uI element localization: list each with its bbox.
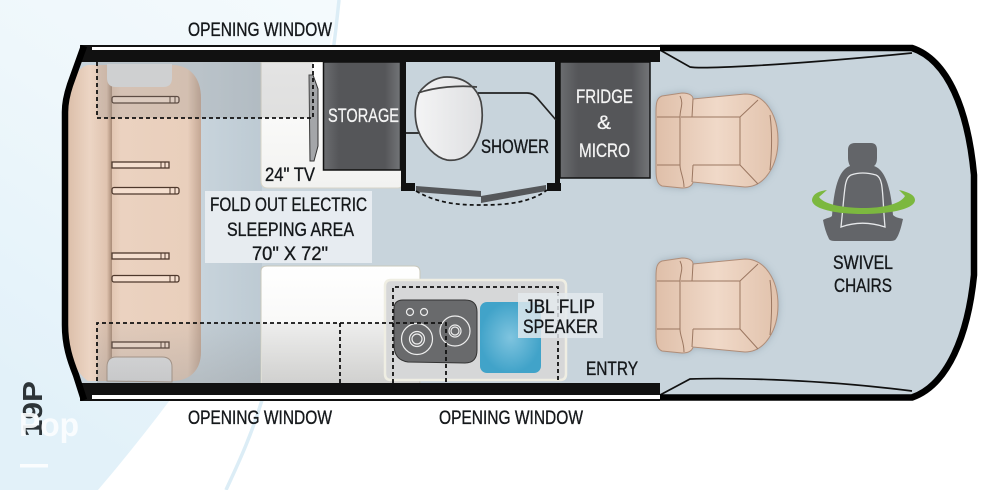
label background: speaker bbox=[518, 293, 603, 338]
label: fold out sleeping area: 70" X 72" bbox=[252, 244, 328, 265]
watermark: Pop logo: Pop bbox=[19, 406, 79, 443]
shower doors bbox=[416, 185, 546, 203]
label: fold out sleeping area bbox=[210, 195, 367, 265]
toilet bbox=[415, 77, 482, 160]
label: shower: SHOWER bbox=[481, 137, 549, 158]
label: JBL flip speaker: JBL FLIP bbox=[525, 297, 595, 318]
fridge and microwave bbox=[560, 62, 650, 178]
cockpit floor lines and shell bbox=[65, 45, 974, 401]
dashed outlines bbox=[97, 62, 558, 390]
headrest bbox=[107, 357, 172, 382]
kitchen counter bbox=[385, 280, 566, 380]
rear sofa bbox=[68, 64, 201, 382]
van floor plan bbox=[65, 45, 974, 401]
label: opening window bottom right: OPENING WINDOW bbox=[439, 408, 583, 429]
label: opening window top: OPENING WINDOW bbox=[188, 20, 332, 41]
label: fridge and micro bbox=[576, 87, 633, 162]
van floor bbox=[65, 50, 972, 397]
seat: passenger bbox=[656, 93, 778, 188]
pop watermark model code: 19P bbox=[17, 381, 48, 437]
shower bbox=[401, 62, 561, 205]
label: fold out sleeping area: SLEEPING AREA bbox=[227, 220, 354, 241]
label: opening window bottom left: OPENING WINDOW bbox=[188, 408, 332, 429]
seat: driver bbox=[656, 258, 778, 353]
van outline bbox=[660, 48, 974, 398]
icon: swivel chair bbox=[812, 143, 915, 241]
shade under windows bbox=[97, 62, 313, 118]
label: 24 inch TV: 24" TV bbox=[265, 165, 315, 186]
label: fridge and micro: & bbox=[597, 113, 611, 134]
label: swivel chairs: SWIVEL bbox=[833, 253, 893, 274]
sofa straps bbox=[112, 96, 179, 348]
label: swivel chairs: CHAIRS bbox=[834, 276, 892, 297]
watermark: Pop logo bbox=[19, 406, 79, 468]
lower cabinet bbox=[261, 266, 420, 384]
top wall bbox=[80, 45, 660, 62]
label: JBL flip speaker: SPEAKER bbox=[523, 317, 598, 338]
label: swivel chairs bbox=[833, 253, 893, 297]
rotation arrow bbox=[812, 190, 915, 214]
label: fridge and micro: MICRO bbox=[579, 141, 630, 162]
storage bbox=[324, 62, 400, 170]
label: fridge and micro: FRIDGE bbox=[576, 87, 633, 108]
upper cabinet bbox=[261, 62, 402, 188]
stove bbox=[394, 300, 477, 363]
sink bbox=[480, 302, 541, 373]
label: JBL flip speaker bbox=[523, 297, 598, 338]
label: entry: ENTRY bbox=[586, 359, 638, 380]
TV bbox=[309, 75, 318, 161]
label: storage: STORAGE bbox=[328, 106, 399, 127]
drain line bbox=[406, 93, 556, 133]
headrest bbox=[107, 64, 172, 87]
label: fold out sleeping area: FOLD OUT ELECTRIC bbox=[210, 195, 367, 216]
bottom wall bbox=[80, 383, 660, 401]
label background: sleeping area bbox=[205, 191, 372, 263]
